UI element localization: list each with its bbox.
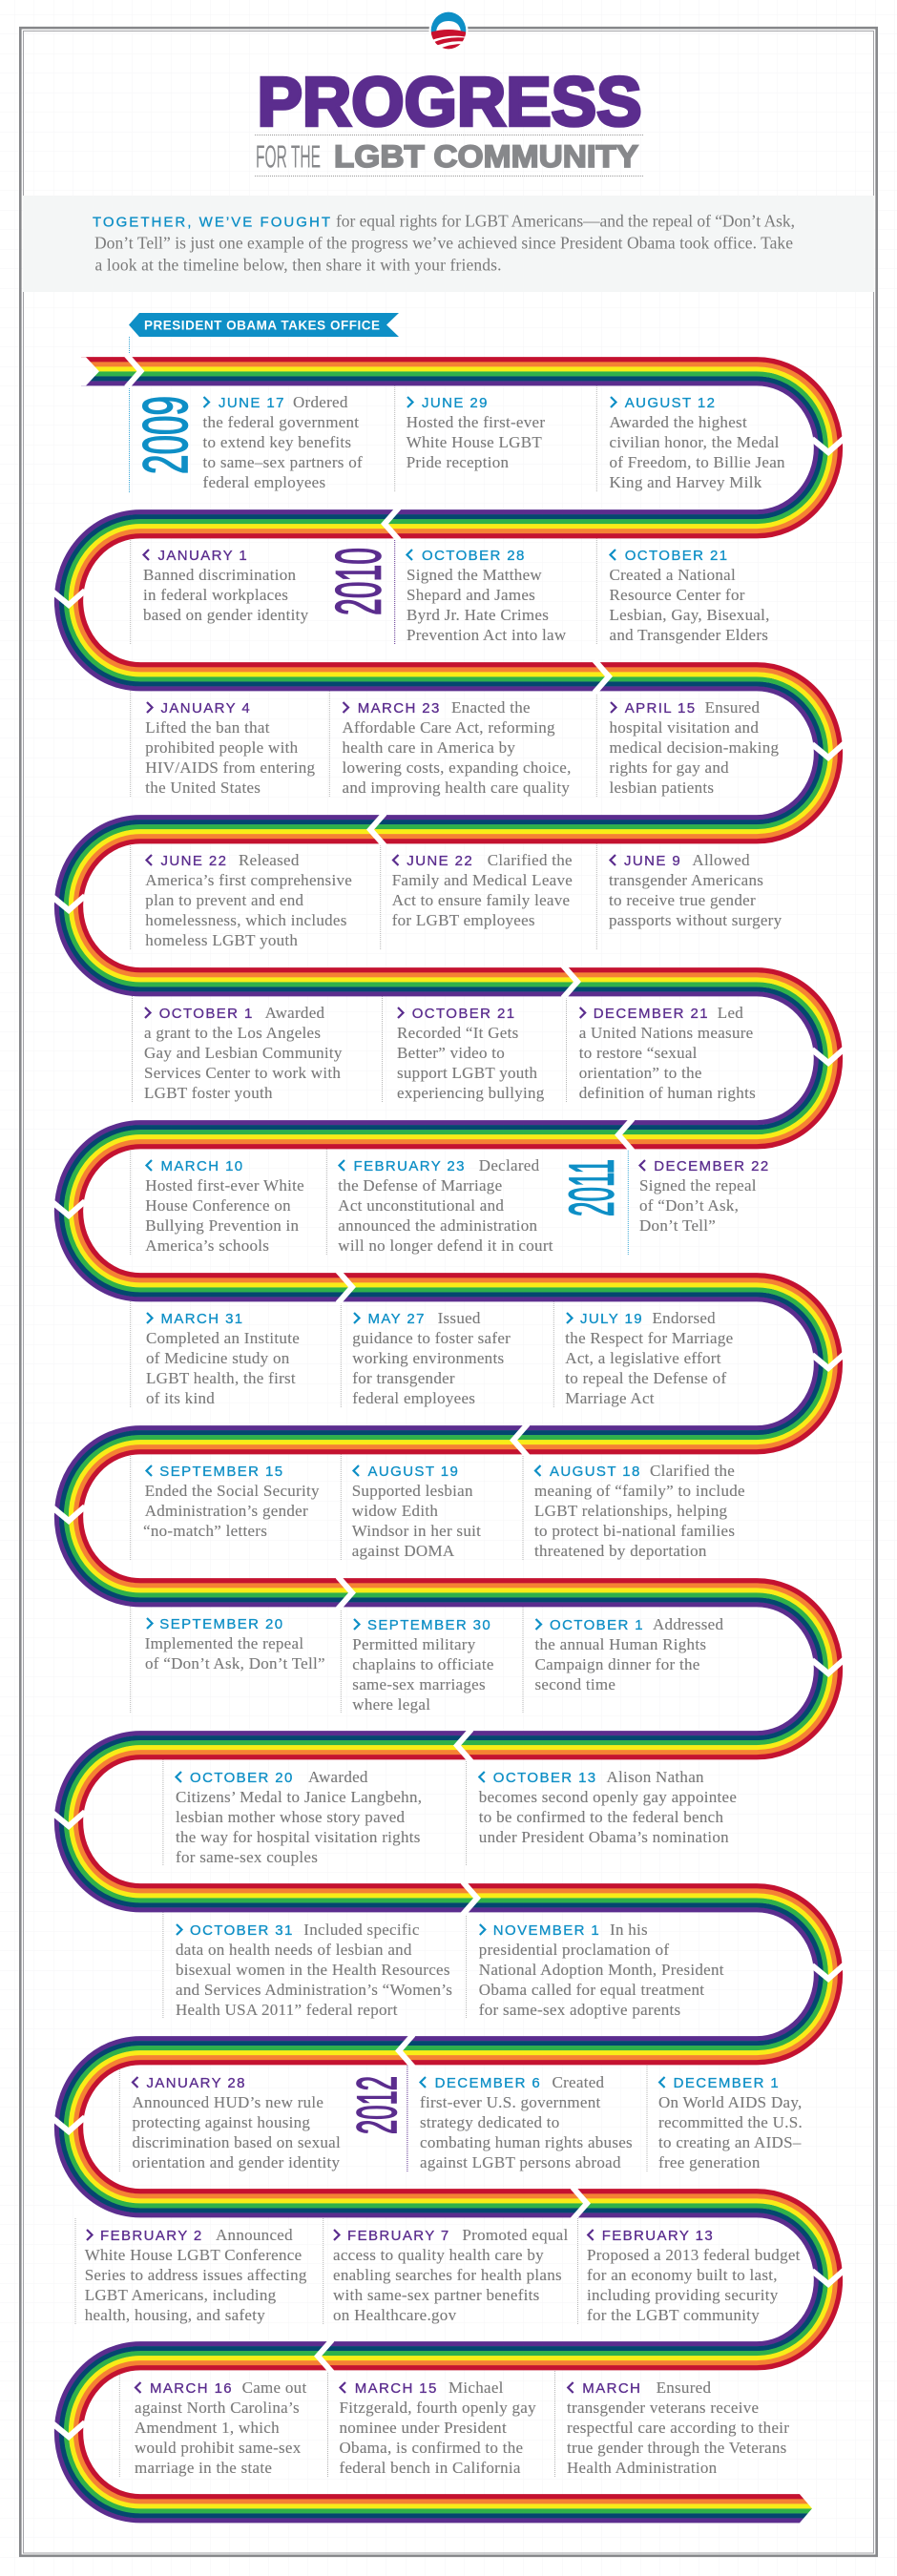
event: September 15 2011: Ended the Social Security (145, 1482, 320, 1500)
event: August 12 2009: Awarded the highest (609, 413, 747, 431)
event: June 29 2009: White House LGBT (407, 433, 542, 451)
event: March 15 2012 (340, 2379, 536, 2477)
event: October 21 2009: and Transgender Elders (609, 626, 768, 644)
event: October 28 2009: Byrd Jr. Hate Crimes (407, 606, 549, 624)
event: June 22 family leave: for LGBT employees (392, 911, 535, 929)
event: March 2012: respectful care according to their (567, 2419, 789, 2437)
event: February 2 2012: FEBRUARY 2 (100, 2228, 203, 2244)
event: October 28 2009: OCTOBER 28 (422, 548, 526, 564)
event: November 1 2011 (479, 1921, 724, 2019)
event: February 2 2012: LGBT Americans, including (85, 2286, 277, 2304)
panel: introduction (23, 196, 874, 292)
event: January 28 2012: Announced HUD’s new rule (132, 2093, 323, 2111)
event: August 19 2011: against DOMA (352, 1542, 455, 1560)
event: February 2 2012: health, housing, and safety (85, 2306, 265, 2324)
event: October 31 2011: OCTOBER 31 (190, 1922, 294, 1939)
event: March 10 2011 (145, 1158, 304, 1255)
event: October 31 2011: and Services Administration’s “Women’s (176, 1981, 452, 1999)
event: January 4: the United States (145, 779, 261, 797)
event: October 1 2011: Campaign dinner for the (534, 1655, 700, 1673)
text: 2012 (346, 2076, 408, 2134)
event: January 28 2012: protecting against housing (132, 2113, 310, 2131)
event: June 22 homelessness: JUNE 22 (160, 853, 227, 869)
event: October 21 2010: Recorded “It Gets (397, 1024, 519, 1042)
event: October 21 2010: support LGBT youth (397, 1064, 538, 1082)
event: August 12 2009: King and Harvey Milk (609, 473, 762, 491)
event: October 13 2011: to be confirmed to the federal bench (479, 1808, 723, 1826)
event: March 23: MARCH 23 (358, 700, 441, 717)
event: March 16 2012: against North Carolina’s (135, 2399, 300, 2417)
event: June 17 2009: to same–sex partners of (202, 453, 363, 471)
event: January 28 2012 (132, 2075, 341, 2171)
event: August 12 2009: AUGUST 12 (625, 395, 716, 411)
event: October 28 2009: Signed the Matthew (407, 566, 542, 584)
event: October 1 2011: the annual Human Rights (534, 1635, 706, 1653)
event: June 22 homelessness: homelessness, which includes (145, 911, 347, 929)
event: December 22 2010: Signed the repeal (639, 1176, 757, 1195)
event: December 1 2011: to creating an AIDS– (658, 2133, 802, 2151)
event: September 20 2011: SEPTEMBER 20 (159, 1616, 283, 1632)
event: December 6 2011: strategy dedicated to (420, 2113, 560, 2131)
event: November 1 2011: presidential proclamation of (479, 1941, 669, 1959)
event: December 21 2010: Led (718, 1004, 743, 1022)
event: March 2012: transgender veterans receive (567, 2399, 759, 2417)
event: May 27 2011: working environments (352, 1349, 504, 1367)
event: October 13 2011: Alison Nathan (607, 1768, 704, 1786)
event: July 19 2011: to repeal the Defense of (565, 1369, 726, 1387)
event: April 15: APRIL 15 (625, 700, 697, 717)
event: January 4 (145, 700, 316, 797)
event: August 12 2009: of Freedom, to Billie Jean (609, 453, 785, 471)
event: February 2 2012: Announced (216, 2226, 293, 2244)
event: March 16 2012 (135, 2379, 306, 2477)
event: June 22 family leave (392, 851, 573, 929)
event: June 9: to receive true gender (609, 891, 756, 909)
event: June 17 2009: federal employees (202, 473, 325, 491)
event: December 21 2010: a United Nations measure (579, 1024, 754, 1042)
event: September 30 2011: same-sex marriages (352, 1675, 486, 1693)
intro text (94, 212, 795, 275)
event: March 23: lowering costs, expanding choice, (342, 758, 572, 777)
event: October 31 2011 (176, 1921, 452, 2019)
event: September 15 2011 (143, 1464, 320, 1540)
icon: campaign logo (429, 10, 468, 52)
event: June 29 2009: JUNE 29 (422, 395, 489, 411)
event: February 23 2011: will no longer defend it in court (338, 1236, 553, 1255)
event: October 13 2011: becomes second openly gay appointee (479, 1788, 737, 1806)
event: June 22 family leave: Family and Medical Leave (392, 871, 573, 889)
event: December 6 2011: against LGBT persons abroad (420, 2153, 621, 2171)
event: August 18 2011: meaning of “family” to include (534, 1482, 745, 1500)
event: March 2012: Ensured (657, 2379, 711, 2397)
event: February 13 2012 (587, 2228, 801, 2324)
event: February 2 2012 (85, 2226, 307, 2324)
event: September 20 2011 (145, 1616, 325, 1672)
event: December 6 2011: combating human rights abuses (420, 2133, 633, 2151)
event: August 19 2011: widow Edith (352, 1502, 438, 1520)
event: December 22 2010 (639, 1158, 770, 1235)
event: March 16 2012: MARCH 16 (150, 2380, 233, 2397)
event: October 21 2010: Better” video to (397, 1044, 505, 1062)
event: June 9: JUNE 9 (624, 853, 681, 869)
event: August 18 2011: AUGUST 18 (550, 1464, 641, 1480)
event: October 1 2010: Gay and Lesbian Community (144, 1044, 343, 1062)
event: August 19 2011 (352, 1464, 481, 1560)
event: September 30 2011 (352, 1617, 494, 1714)
event: June 17 2009: Ordered (293, 393, 348, 411)
event: April 15: rights for gay and (609, 758, 729, 777)
event: September 15 2011: “no-match” letters (143, 1522, 267, 1540)
event: October 1 2011: second time (534, 1675, 615, 1693)
event: June 17 2009: the federal government (202, 413, 359, 431)
event: April 15: medical decision-making (609, 738, 780, 757)
event: August 18 2011: Clarified the (650, 1462, 735, 1480)
subtitle: for the LGBT community: FOR THE (256, 139, 321, 174)
event: December 6 2011: first-ever U.S. government (420, 2093, 601, 2111)
event: August 19 2011: Supported lesbian (352, 1482, 473, 1500)
event: January 4: HIV/AIDS from entering (145, 758, 316, 777)
event: August 18 2011: to protect bi-national families (534, 1522, 735, 1540)
event: March 31 2011 (146, 1311, 300, 1407)
event: March 16 2012: would prohibit same-sex (135, 2439, 302, 2457)
event: March 2012: Health Administration (567, 2459, 718, 2477)
event: January 4: JANUARY 4 (160, 700, 251, 717)
dividers (75, 337, 647, 2478)
event: June 29 2009 (407, 395, 545, 471)
event: April 15: lesbian patients (609, 779, 714, 797)
event: October 13 2011 (479, 1768, 737, 1846)
rainbow timeline ribbon (56, 360, 840, 2521)
event: September 15 2011: SEPTEMBER 15 (159, 1464, 283, 1480)
event: December 1 2011 (658, 2075, 803, 2171)
event: September 30 2011: SEPTEMBER 30 (367, 1617, 491, 1633)
event: March 23: health care in America by (342, 738, 515, 757)
event: February 23 2011: Act unconstitutional and (338, 1196, 504, 1215)
intro text: a look at the timeline below, then share it with your friends. (95, 256, 502, 275)
event: June 17 2009: to extend key benefits (202, 433, 351, 451)
event: March 23: and improving health care quality (342, 779, 570, 797)
event: March 15 2012: Fitzgerald, fourth openly gay (340, 2399, 536, 2417)
event: December 22 2010: of “Don’t Ask, (639, 1196, 739, 1215)
event: March 10 2011: America’s schools (145, 1236, 269, 1255)
event: February 13 2012: including providing security (587, 2286, 779, 2304)
event: February 7 2012: access to quality health care by (333, 2246, 544, 2264)
event: June 9: Allowed (692, 851, 750, 869)
event: May 27 2011: Issued (438, 1309, 481, 1327)
event: March 15 2012: Michael (448, 2379, 504, 2397)
event: October 21 2009 (609, 548, 770, 644)
event: March 31 2011: LGBT health, the first (146, 1369, 296, 1387)
event: March 10 2011: House Conference on (145, 1196, 291, 1215)
event: October 21 2010: experiencing bullying (397, 1084, 545, 1102)
event: March 2012 (567, 2379, 789, 2477)
event: December 6 2011: DECEMBER 6 (435, 2075, 541, 2091)
year: 2009: 2009 (130, 396, 200, 474)
event: October 31 2011: Included specific (303, 1921, 420, 1939)
event: July 19 2011: the Respect for Marriage (565, 1329, 733, 1347)
event: August 12 2009 (609, 395, 785, 491)
event: January 28 2012: orientation and gender identity (132, 2153, 341, 2171)
event: September 20 2011: Implemented the repeal (145, 1634, 303, 1652)
event: June 22 family leave: Clarified the (488, 851, 573, 869)
event: March 15 2012: nominee under President (340, 2419, 507, 2437)
event: February 13 2012: for the LGBT community (587, 2306, 760, 2324)
event: January 4: prohibited people with (145, 738, 299, 757)
event: August 18 2011 (534, 1462, 745, 1560)
event: March 15 2012: federal bench in California (340, 2459, 521, 2477)
event: February 23 2011: announced the administration (338, 1216, 537, 1235)
event: October 13 2011: OCTOBER 13 (493, 1770, 597, 1786)
event: February 2 2012: Series to address issues affecting (85, 2266, 307, 2284)
intro lead-in: TOGETHER, WE’VE FOUGHT (93, 214, 330, 231)
event: October 31 2011: bisexual women in the Health Resources (176, 1961, 450, 1979)
event: June 29 2009: Pride reception (407, 453, 509, 471)
event: July 19 2011: Marriage Act (565, 1389, 655, 1407)
event: December 21 2010: DECEMBER 21 (594, 1006, 709, 1022)
event: October 1 2010: a grant to the Los Angeles (144, 1024, 321, 1042)
intro text: for equal rights for LGBT Americans—and the repeal of “Don’t Ask, (336, 212, 795, 231)
event: October 21 2009: Lesbian, Gay, Bisexual, (609, 606, 770, 624)
subtitle: for the LGBT community: LGBT COMMUNITY (334, 139, 638, 174)
event: June 9: passports without surgery (609, 911, 782, 929)
event: March 16 2012: Amendment 1, which (135, 2419, 280, 2437)
event: November 1 2011: for same-sex adoptive parents (479, 2001, 680, 2019)
event: October 21 2010 (397, 1006, 545, 1102)
event: October 20 2011: the way for hospital visitation rights (176, 1828, 421, 1846)
event: December 21 2010: definition of human rights (579, 1084, 756, 1102)
event: March 2012: MARCH (582, 2380, 641, 2397)
event: July 19 2011 (565, 1309, 733, 1407)
event: October 1 2010 (144, 1004, 343, 1102)
event: December 6 2011: Created (552, 2073, 605, 2091)
event: October 1 2011 (534, 1615, 724, 1693)
event: November 1 2011: National Adoption Month, President (479, 1961, 724, 1979)
event: August 19 2011: Windsor in her suit (352, 1522, 481, 1540)
event: August 18 2011: LGBT relationships, helping (534, 1502, 727, 1520)
event: October 1 2010: LGBT foster youth (144, 1084, 273, 1102)
ribbon break chevrons (52, 355, 845, 2437)
event: May 27 2011: MAY 27 (368, 1311, 426, 1327)
event: March 10 2011: MARCH 10 (160, 1158, 244, 1174)
event: October 1 2010: Services Center to work with (144, 1064, 341, 1082)
event: February 7 2012: FEBRUARY 7 (347, 2228, 450, 2244)
event: October 20 2011: lesbian mother whose story paved (176, 1808, 406, 1826)
event: December 21 2010: orientation” to the (579, 1064, 702, 1082)
event: October 1 2011: OCTOBER 1 (550, 1617, 644, 1633)
event: May 27 2011 (352, 1309, 511, 1407)
event: March 31 2011: MARCH 31 (160, 1311, 244, 1327)
event: June 17 2009 (202, 393, 363, 491)
event: October 21 2010: OCTOBER 21 (412, 1006, 515, 1022)
event: September 30 2011: where legal (352, 1695, 430, 1714)
event: September 20 2011: of “Don’t Ask, Don’t Tell” (145, 1654, 325, 1672)
banner: President Obama takes office (129, 313, 399, 337)
event: June 9: transgender Americans (609, 871, 763, 889)
event: October 20 2011 (176, 1768, 422, 1866)
event: October 1 2010: Awarded (265, 1004, 325, 1022)
event: March 10 2011: Bullying Prevention in (145, 1216, 300, 1235)
event: December 22 2010: Don’t Tell” (639, 1216, 716, 1235)
title: Progress: PROGRESS (258, 65, 641, 141)
event: June 22 family leave: JUNE 22 (407, 853, 473, 869)
event: October 28 2009: Shepard and James (407, 586, 535, 604)
event: October 20 2011: OCTOBER 20 (190, 1770, 294, 1786)
event: January 1 2010: based on gender identity (143, 606, 309, 624)
text: 2010 (323, 548, 395, 615)
event: March 31 2011: Completed an Institute (146, 1329, 300, 1347)
event: October 21 2009: Resource Center for (609, 586, 745, 604)
event: November 1 2011: In his (610, 1921, 648, 1939)
event: October 21 2009: Created a National (609, 566, 736, 584)
event: March 2012: true gender through the Veterans (567, 2439, 787, 2457)
event: November 1 2011: NOVEMBER 1 (493, 1922, 600, 1939)
event: August 12 2009: civilian honor, the Medal (609, 433, 780, 451)
event: April 15 (609, 698, 780, 797)
event: September 30 2011: Permitted military (352, 1635, 476, 1653)
event: June 22 homelessness: America’s first comprehensive (145, 871, 352, 889)
event: August 19 2011: AUGUST 19 (368, 1464, 459, 1480)
event: December 1 2011: free generation (658, 2153, 761, 2171)
event: April 15: hospital visitation and (609, 718, 759, 737)
event: January 1 2010: in federal workplaces (143, 586, 288, 604)
event: July 19 2011: JULY 19 (580, 1311, 643, 1327)
banner: President Obama takes office: PRESIDENT OBAMA TAKES OFFICE (144, 319, 380, 332)
event: March 15 2012: MARCH 15 (355, 2380, 438, 2397)
event: February 23 2011 (338, 1156, 553, 1255)
event: January 1 2010: Banned discrimination (143, 566, 296, 584)
event: June 17 2009: JUNE 17 (219, 395, 285, 411)
event: December 22 2010: DECEMBER 22 (654, 1158, 770, 1174)
intro text: Don’t Tell” is just one example of the progress we’ve achieved since President Obama took office. Take (94, 233, 793, 252)
event: March 23 (342, 698, 572, 797)
event: January 28 2012: discrimination based on sexual (132, 2133, 341, 2151)
event: December 1 2011: recommitted the U.S. (658, 2113, 803, 2131)
event: October 21 2009: OCTOBER 21 (625, 548, 728, 564)
event: October 28 2009: Prevention Act into law (407, 626, 567, 644)
event: February 2 2012: White House LGBT Conference (85, 2246, 302, 2264)
event: January 1 2010: JANUARY 1 (158, 548, 248, 564)
event: October 1 2011: Addressed (653, 1615, 724, 1633)
event: March 31 2011: of Medicine study on (146, 1349, 290, 1367)
subtitle: for the LGBT community (255, 135, 644, 176)
event: February 7 2012: on Healthcare.gov (333, 2306, 457, 2324)
event: January 28 2012: JANUARY 28 (147, 2075, 246, 2091)
text: 2011 (556, 1159, 627, 1216)
event: June 22 family leave: Act to ensure family leave (392, 891, 570, 909)
event: June 22 homelessness: Released (239, 851, 300, 869)
event: December 21 2010: to restore “sexual (579, 1044, 698, 1062)
event: March 10 2011: Hosted first-ever White (145, 1176, 304, 1195)
event: June 22 homelessness: homeless LGBT youth (145, 931, 298, 949)
event: June 22 homelessness (145, 851, 352, 949)
event: June 22 homelessness: plan to prevent and end (145, 891, 304, 909)
event: November 1 2011: Obama called for equal treatment (479, 1981, 704, 1999)
event: September 30 2011: chaplains to officiate (352, 1655, 494, 1673)
event: August 18 2011: threatened by deportation (534, 1542, 707, 1560)
event: December 1 2011: DECEMBER 1 (674, 2075, 780, 2091)
event: October 28 2009 (407, 548, 567, 644)
event: February 7 2012: enabling searches for health plans (333, 2266, 562, 2284)
event: May 27 2011: for transgender (352, 1369, 455, 1387)
event: October 20 2011: Citizens’ Medal to Janice Langbehn, (176, 1788, 422, 1806)
event: March 16 2012: marriage in the state (135, 2459, 272, 2477)
event: February 7 2012 (333, 2226, 568, 2324)
event: June 9 (609, 851, 782, 929)
event: May 27 2011: federal employees (352, 1389, 475, 1407)
event: July 19 2011: Act, a legislative effort (565, 1349, 721, 1367)
event: January 1 2010 (143, 548, 309, 624)
event: December 21 2010 (579, 1004, 756, 1102)
event: September 15 2011: Administration’s gender (145, 1502, 308, 1520)
event: May 27 2011: guidance to foster safer (352, 1329, 511, 1347)
event: July 19 2011: Endorsed (653, 1309, 716, 1327)
event: March 15 2012: Obama, is confirmed to the (340, 2439, 523, 2457)
event: February 7 2012: with same-sex partner benefits (333, 2286, 540, 2304)
event: March 31 2011: of its kind (146, 1389, 215, 1407)
event: October 20 2011: for same-sex couples (176, 1848, 318, 1866)
event: December 1 2011: On World AIDS Day, (658, 2093, 803, 2111)
event: February 13 2012: FEBRUARY 13 (602, 2228, 714, 2244)
event: February 13 2012: for an economy built to last, (587, 2266, 778, 2284)
event: October 31 2011: data on health needs of lesbian and (176, 1941, 412, 1959)
event: February 23 2011: the Defense of Marriage (338, 1176, 502, 1195)
event: October 13 2011: under President Obama’s nomination (479, 1828, 729, 1846)
event: April 15: Ensured (705, 698, 760, 717)
event: January 4: Lifted the ban that (145, 718, 270, 737)
event: October 31 2011: Health USA 2011” federal report (176, 2001, 398, 2019)
event: March 23: Affordable Care Act, reforming (342, 718, 555, 737)
event: October 1 2010: OCTOBER 1 (159, 1006, 254, 1022)
event: February 23 2011: Declared (479, 1156, 540, 1174)
event: February 23 2011: FEBRUARY 23 (353, 1158, 466, 1174)
event: June 29 2009: Hosted the first-ever (407, 413, 545, 431)
event: December 6 2011 (420, 2073, 633, 2171)
event: March 23: Enacted the (451, 698, 531, 717)
event: March 16 2012: Came out (242, 2379, 306, 2397)
event: February 13 2012: Proposed a 2013 federal budget (587, 2246, 801, 2264)
event: February 7 2012: Promoted equal (462, 2226, 568, 2244)
event: October 20 2011: Awarded (308, 1768, 368, 1786)
